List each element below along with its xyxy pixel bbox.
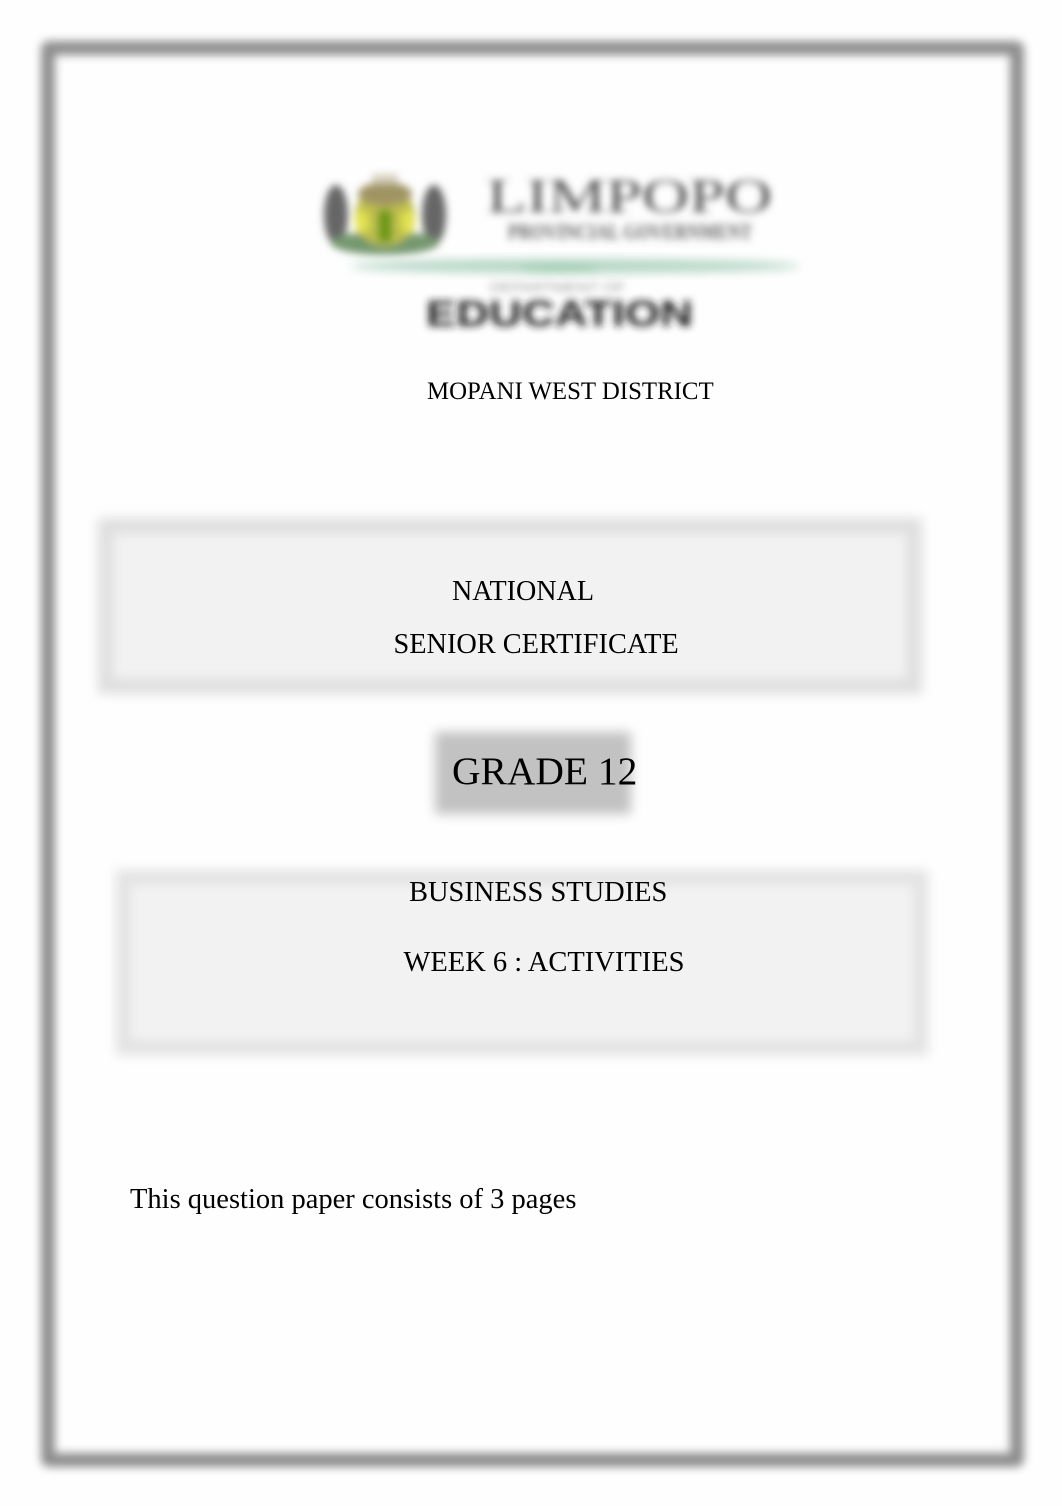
heading: grade 12: GRADE 12	[452, 749, 637, 793]
panel: grade highlight	[435, 732, 631, 814]
wordmark: Limpopo: LIMPOPO	[487, 170, 772, 223]
icon: coat of arms	[324, 174, 446, 255]
district name: MOPANI WEST DISTRICT	[427, 378, 714, 405]
logo: Limpopo Department of Education	[318, 170, 799, 334]
heading: senior certificate: SENIOR CERTIFICATE	[394, 629, 679, 660]
panel: national senior certificate	[98, 518, 922, 694]
wordmark: provincial government: PROVINCIAL GOVERNMENT	[508, 219, 752, 244]
decorative green band	[350, 259, 800, 273]
heading: national: NATIONAL	[452, 576, 594, 607]
page count note: This question paper consists of 3 pages	[130, 1184, 576, 1215]
wordmark: department of: DEPARTMENT OF	[490, 279, 625, 295]
panel: subject and week	[116, 870, 928, 1055]
wordmark: education: EDUCATION	[426, 293, 693, 334]
heading: business studies: BUSINESS STUDIES	[409, 877, 667, 908]
heading: week 6 activities: WEEK 6 : ACTIVITIES	[404, 947, 684, 978]
